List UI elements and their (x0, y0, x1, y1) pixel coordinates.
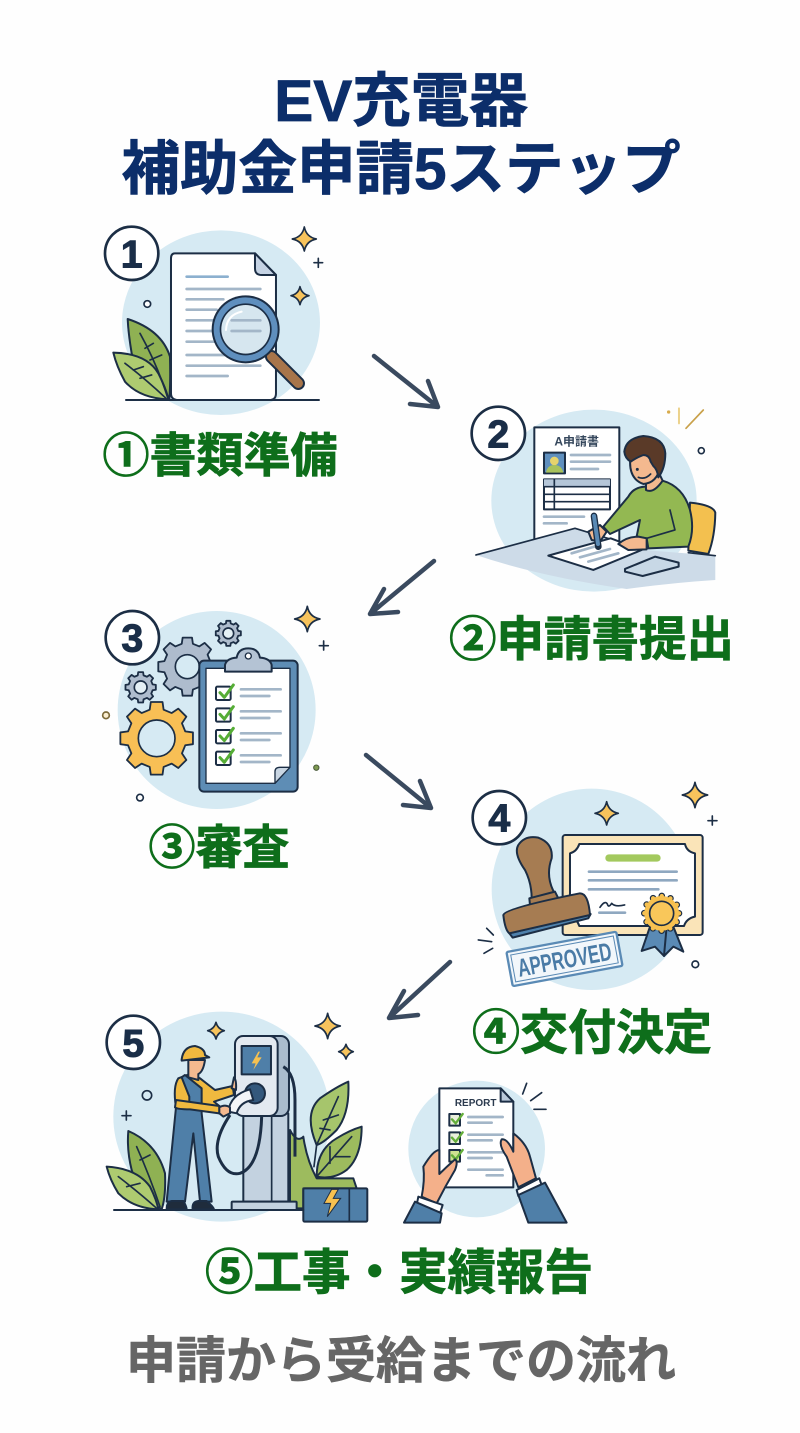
panel: step 1 illustration: 1 (121, 232, 143, 276)
heading: step 3: ③審査 (148, 821, 290, 874)
heading: step 5: ⑤工事・実績報告 (205, 1246, 593, 1300)
panel: step 1 illustration (105, 227, 323, 415)
title: EV充電器 (274, 69, 528, 134)
panel: step 5 report illustration: REPORT (455, 1098, 496, 1109)
panel: step 4 illustration: 4 (488, 797, 510, 841)
panel: step 4 illustration: APPROVED (515, 938, 614, 983)
heading: step 1: ①書類準備 (102, 429, 338, 482)
panel: step 2 illustration: 2 (487, 412, 509, 456)
title: 補助金申請5ステップ (121, 137, 681, 202)
arrow: step 2 to 3 (370, 561, 434, 614)
title (121, 69, 681, 202)
heading: step 4: ④交付決定 (472, 1007, 712, 1060)
panel: step 5 charger illustration (107, 1012, 367, 1222)
panel: step 5 report illustration (404, 1081, 567, 1223)
heading: step 2: ②申請書提出 (449, 614, 734, 667)
arrow: step 3 to 4 (366, 755, 431, 808)
arrow: step 1 to 2 (374, 356, 438, 407)
panel: step 2 illustration (472, 407, 715, 592)
panel: step 2 illustration: A申請書 (554, 434, 599, 449)
footer caption: 申請から受給までの流れ (126, 1333, 676, 1389)
panel: step 3 illustration (103, 606, 328, 809)
panel: step 3 illustration: 3 (121, 617, 143, 661)
panel: step 5 charger illustration: 5 (122, 1021, 144, 1065)
arrow: step 4 to 5 (389, 962, 450, 1018)
panel: step 4 illustration (473, 782, 717, 990)
